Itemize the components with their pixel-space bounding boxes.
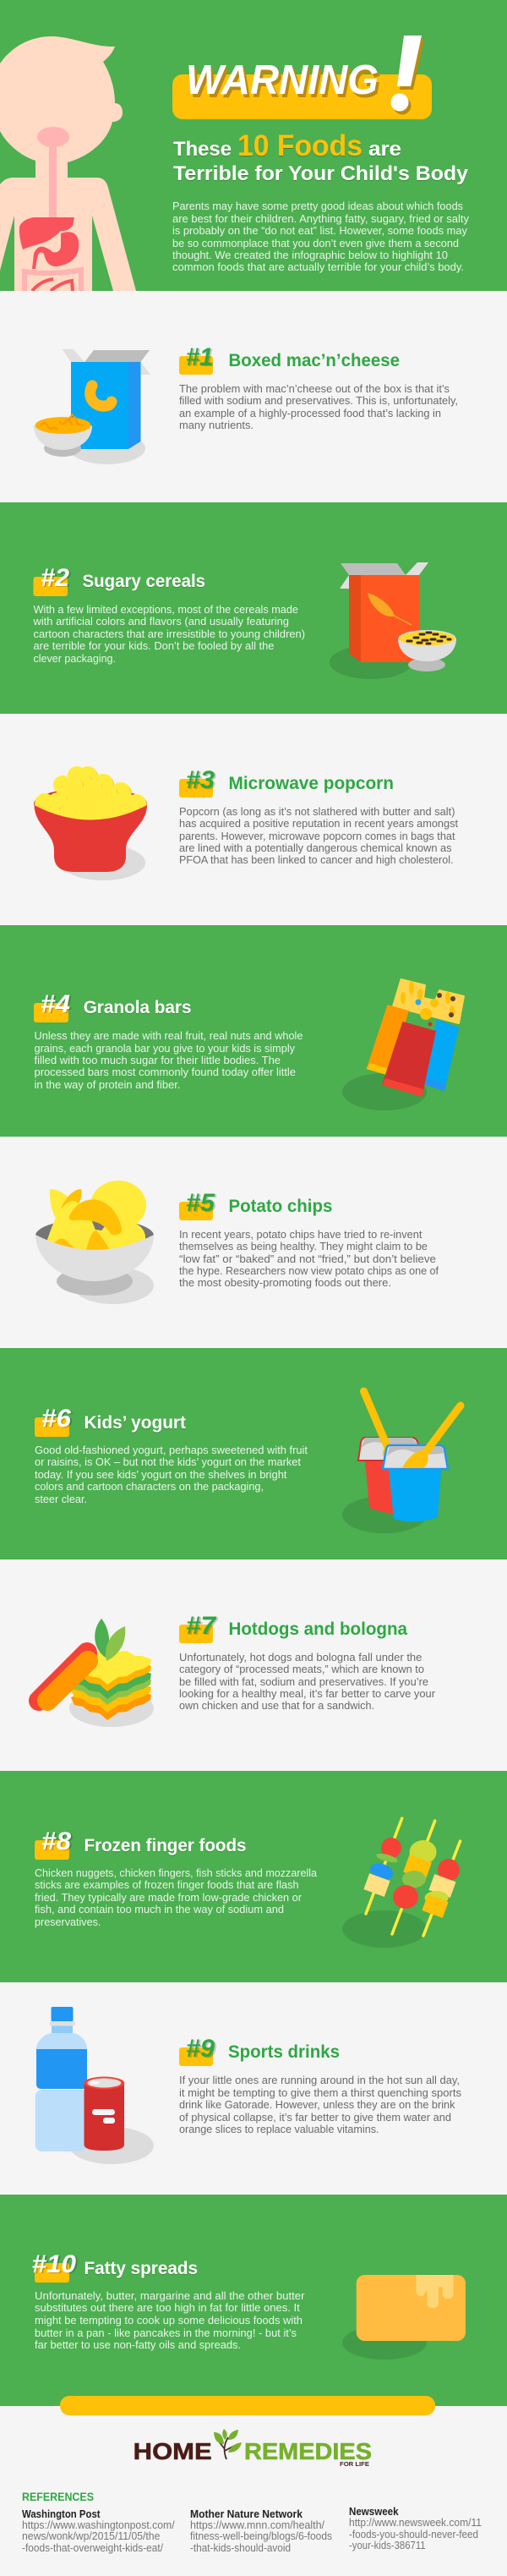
text #7: be filled with fat, sodium and preservatives. If you’re bbox=[179, 1676, 428, 1688]
reference: newsweek: -your-kids-386711 bbox=[349, 2540, 426, 2551]
text #2: cartoon characters that are irresistible to young children) bbox=[34, 628, 305, 640]
panel: #3 microwave popcorn bbox=[0, 714, 507, 925]
heading #3: Microwave popcorn bbox=[228, 774, 394, 793]
text #8: sticks are examples of frozen finger foods that are flash bbox=[35, 1879, 299, 1891]
text #10: might be tempting to cook up some delicious foods with bbox=[35, 2315, 303, 2327]
heading: are bbox=[368, 138, 401, 161]
logo: home remedies for life: HOME bbox=[134, 2438, 212, 2464]
icon: cereal box and bowl bbox=[330, 562, 456, 679]
text #3 bbox=[179, 806, 459, 866]
text #4: filled with too much sugar for their little bodies. The bbox=[34, 1055, 281, 1066]
heading: These bbox=[173, 138, 232, 161]
text #1: an example of a highly-processed food that’s lacking in bbox=[179, 408, 441, 419]
text #2: with artificial colors and flavors (and usually featuring bbox=[32, 616, 289, 628]
logo: home remedies for life: REMEDIES bbox=[244, 2438, 372, 2464]
reference: mother nature network: Mother Nature Network bbox=[190, 2508, 303, 2520]
text #8: fried. They typically are made from low-grade chicken or bbox=[35, 1892, 302, 1904]
yellow footer bar bbox=[60, 2396, 435, 2415]
text #2 bbox=[32, 604, 305, 665]
panel: #4 granola bars bbox=[0, 925, 507, 1137]
reference: washington post: news/wonk/wp/2015/11/05/the bbox=[22, 2530, 160, 2542]
badge #8 bbox=[35, 1828, 71, 1860]
text #7 bbox=[179, 1652, 435, 1712]
text #10: substitutes out there are too high in fat for little ones. It bbox=[35, 2302, 300, 2314]
heading: 10 Foods bbox=[237, 129, 363, 162]
text #4: in the way of protein and fiber. bbox=[34, 1079, 181, 1091]
badge #2 bbox=[34, 564, 69, 596]
text #6: colors and cartoon characters on the packaging, bbox=[35, 1481, 264, 1493]
icon: food skewers bbox=[342, 1818, 461, 1948]
badge #9: #9 bbox=[186, 2035, 215, 2063]
intro text: are best for their children. Anything fatty, sugary, fried or salty bbox=[172, 212, 469, 225]
intro text: Parents may have some pretty good ideas about which foods bbox=[172, 200, 463, 212]
icon: granola bars bbox=[342, 979, 464, 1110]
badge #4: #4 bbox=[41, 990, 70, 1018]
heading #9: Sports drinks bbox=[228, 2042, 340, 2062]
text #1 bbox=[179, 383, 458, 431]
heading #1: Boxed mac’n’cheese bbox=[228, 351, 400, 370]
reference: mother nature network: -that-kids-should-avoid bbox=[190, 2542, 291, 2554]
panel: footer bbox=[22, 2396, 482, 2554]
text #9: orange slices to replace valuable vitamins. bbox=[179, 2124, 379, 2135]
logo: home remedies for life bbox=[134, 2429, 372, 2468]
panel: #5 potato chips bbox=[0, 1137, 507, 1348]
reference: washington post: https://www.washingtonpost.com/ bbox=[22, 2519, 175, 2531]
text #7: category of “processed meats,” which are known to bbox=[179, 1663, 424, 1675]
badge #1 bbox=[179, 343, 213, 375]
text #4: Unless they are made with real fruit, real nuts and whole bbox=[34, 1030, 303, 1042]
text #1: The problem with mac’n’cheese out of the box is that it’s bbox=[179, 383, 450, 395]
panel: #6 kids' yogurt bbox=[0, 1348, 507, 1559]
intro text: common foods that are actually terrible for your child’s body. bbox=[172, 260, 464, 273]
heading #2: Sugary cereals bbox=[83, 572, 205, 591]
reference: washington post: -foods-that-overweight-kids-eat/ bbox=[22, 2542, 163, 2554]
text #2: With a few limited exceptions, most of the cereals made bbox=[34, 604, 298, 616]
text #9: it might be tempting to give them a thirst quenching sports bbox=[179, 2087, 461, 2099]
text #5: themselves as being healthy. They might claim to be bbox=[179, 1241, 428, 1252]
icon: sports bottle and can bbox=[35, 2007, 154, 2164]
icon: bowl of chips bbox=[35, 1181, 154, 1304]
panel: header bbox=[0, 0, 507, 291]
reference: washington post: Washington Post bbox=[22, 2508, 101, 2520]
intro text bbox=[172, 200, 469, 273]
reference: mother nature network bbox=[190, 2508, 332, 2554]
icon: child body silhouette bbox=[0, 36, 136, 291]
heading #6: Kids’ yogurt bbox=[84, 1413, 186, 1433]
text #6: today. If you see kids’ yogurt on the shelves in bright bbox=[35, 1469, 287, 1481]
intro text: is probably on the “do not eat” list. However, some foods may bbox=[172, 224, 467, 237]
text #9: of physical collapse, it’s far better to give them water and bbox=[179, 2112, 451, 2124]
text #9 bbox=[179, 2075, 461, 2135]
text #10: butter in a pan - like pancakes in the morning! - but it’s bbox=[35, 2327, 297, 2339]
badge #6 bbox=[35, 1405, 71, 1437]
icon: macaroni box and bowl bbox=[34, 349, 150, 464]
reference: newsweek: http://www.newsweek.com/11 bbox=[349, 2517, 482, 2529]
text #10 bbox=[35, 2290, 304, 2351]
text #3: PFOA that has been linked to cancer and high cholesterol. bbox=[179, 854, 453, 866]
heading #7: Hotdogs and bologna bbox=[228, 1620, 407, 1639]
panel: #8 frozen finger foods bbox=[0, 1771, 507, 1982]
reference: washington post bbox=[22, 2508, 175, 2554]
text #5: “low fat” or “baked” and not “fried,” but don’t believe bbox=[179, 1253, 436, 1265]
badge #4 bbox=[34, 990, 70, 1022]
heading: Terrible for Your Child's Body bbox=[173, 162, 469, 185]
text #6 bbox=[35, 1444, 308, 1505]
text #7: Unfortunately, hot dogs and bologna fall under the bbox=[179, 1652, 422, 1663]
text #8: fish, and contain too much in the way of sodium and bbox=[35, 1904, 284, 1916]
text #6: or raisins, is OK – but not the kids’ yogurt on the market bbox=[35, 1456, 302, 1468]
reference: newsweek bbox=[349, 2506, 482, 2551]
text #7: own chicken and use that for a sandwich. bbox=[179, 1700, 374, 1712]
intro text: be so commonplace that you don’t even give them a second bbox=[172, 237, 459, 249]
text #5: the most obesity-promoting foods out there. bbox=[179, 1277, 391, 1289]
text #1: filled with sodium and preservatives. This is, unfortunately, bbox=[179, 395, 458, 407]
reference: mother nature network: fitness-well-being/blogs/6-foods bbox=[190, 2530, 332, 2542]
heading #10: Fatty spreads bbox=[84, 2259, 198, 2278]
badge #10: #10 bbox=[32, 2250, 76, 2278]
text #4: grains, each granola bar you give to your kids is simply bbox=[34, 1043, 296, 1055]
warning title: WARNING bbox=[186, 58, 379, 103]
text #4 bbox=[34, 1030, 303, 1091]
heading #5: Potato chips bbox=[228, 1197, 332, 1216]
text #5: the hype. Researchers now view potato chips as one of bbox=[179, 1265, 439, 1277]
text #9: drink like Gatorade. However, unless they are on the brink bbox=[179, 2099, 455, 2111]
reference: newsweek: Newsweek bbox=[349, 2506, 399, 2518]
badge #5: #5 bbox=[186, 1189, 215, 1217]
icon: hotdog and sandwich stack bbox=[39, 1619, 154, 1727]
text #6: Good old-fashioned yogurt, perhaps sweetened with fruit bbox=[35, 1444, 308, 1456]
intro text: thought. We created the infographic below to highlight 10 bbox=[172, 249, 448, 261]
text #3: Popcorn (as long as it’s not slathered with butter and salt) bbox=[179, 806, 455, 818]
badge #7 bbox=[179, 1612, 216, 1643]
badge #3: #3 bbox=[186, 766, 215, 794]
references heading: REFERENCES bbox=[22, 2490, 94, 2503]
text #8 bbox=[35, 1867, 317, 1928]
text #9: If your little ones are running around in the hot sun all day, bbox=[179, 2075, 460, 2086]
heading #8: Frozen finger foods bbox=[84, 1836, 247, 1855]
text #3: has acquired a positive reputation in recent years amongst bbox=[179, 818, 459, 830]
text #2: are terrible for your kids. Don’t be fooled by all the bbox=[34, 640, 275, 652]
panel: #9 sports drinks bbox=[0, 1982, 507, 2195]
icon: exclamation mark bbox=[390, 36, 422, 112]
heading bbox=[173, 129, 469, 185]
reference: mother nature network: https://www.mnn.com/health/ bbox=[190, 2519, 325, 2531]
badge #5 bbox=[179, 1189, 215, 1220]
panel: #2 sugary cereals bbox=[0, 502, 507, 714]
text #8: Chicken nuggets, chicken fingers, fish sticks and mozzarella bbox=[35, 1867, 317, 1879]
text #3: parents. However, microwave popcorn comes in bags that bbox=[179, 830, 455, 842]
badge #2: #2 bbox=[41, 564, 69, 592]
panel: #10 fatty spreads bbox=[0, 2195, 507, 2406]
text #3: are lined with a potentially dangerous chemical known as bbox=[179, 842, 451, 854]
badge #8: #8 bbox=[41, 1828, 71, 1855]
reference: newsweek: -foods-you-should-never-feed bbox=[349, 2529, 478, 2540]
icon: popcorn bowl bbox=[34, 766, 147, 880]
text #4: processed bars most commonly found today offer little bbox=[34, 1066, 296, 1078]
text #1: many nutrients. bbox=[179, 419, 254, 431]
icon: butter block bbox=[342, 2275, 466, 2360]
text #5: In recent years, potato chips have tried to re-invent bbox=[179, 1229, 422, 1241]
text #10: far better to use non-fatty oils and spreads. bbox=[35, 2339, 241, 2351]
text #10: Unfortunately, butter, margarine and all the other butter bbox=[35, 2290, 304, 2302]
icon: yogurt cups with spoons bbox=[342, 1391, 461, 1533]
text #5 bbox=[179, 1229, 439, 1289]
text #6: steer clear. bbox=[35, 1494, 87, 1505]
text #8: preservatives. bbox=[35, 1916, 101, 1928]
heading #4: Granola bars bbox=[84, 998, 191, 1017]
badge #7: #7 bbox=[186, 1612, 216, 1640]
panel: #1 boxed mac'n'cheese bbox=[0, 291, 507, 502]
warning bar bbox=[172, 74, 432, 119]
logo: home remedies for life: FOR LIFE bbox=[340, 2462, 369, 2468]
text #2: clever packaging. bbox=[34, 653, 116, 665]
text #7: looking for a healthy meal, it’s far better to carve your bbox=[179, 1688, 435, 1700]
badge #6: #6 bbox=[41, 1405, 71, 1433]
panel: #7 hotdogs and bologna bbox=[0, 1559, 507, 1771]
badge #1: #1 bbox=[186, 343, 213, 371]
